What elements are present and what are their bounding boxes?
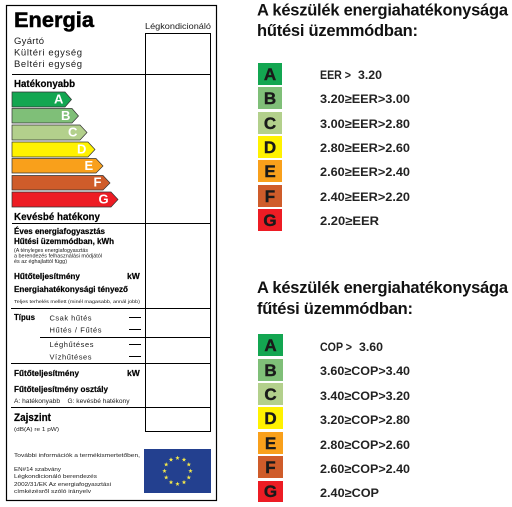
class B: B [264, 361, 277, 380]
type block: Léghűtéses [50, 340, 94, 349]
arrow B: B [61, 108, 70, 123]
annual consumption block: Teljes terhelés mellett (minél magasabb, annál jobb) [14, 299, 140, 305]
class C: C [264, 114, 276, 133]
class B: 3.60≥COP>3.40 [320, 364, 410, 378]
footer notes: 2002/31/EK Az energiafogyasztási [14, 482, 111, 488]
annual consumption block: (A tényleges energiafogyasztás [14, 248, 89, 254]
class D: D [264, 138, 276, 157]
heading: heating mode [257, 279, 509, 318]
class D [258, 407, 410, 429]
heading: cooling mode: A készülék energiahatékonysága [257, 2, 509, 20]
class E [258, 432, 410, 454]
type block: Csak hűtés [50, 314, 92, 322]
heating class table [258, 334, 410, 502]
class A [258, 334, 383, 356]
annual consumption block: kW [127, 271, 141, 281]
heating output block: Fűtőteljesítmény osztály [14, 384, 108, 394]
annual consumption block [14, 227, 141, 305]
class A: COP > [320, 340, 352, 354]
class A: A [264, 336, 277, 355]
manufacturer fields [14, 36, 82, 70]
manufacturer fields: Beltéri egység [14, 59, 82, 70]
class G [258, 481, 379, 502]
class B [258, 87, 410, 109]
noise block: (dB(A) re 1 pW) [14, 427, 59, 433]
annual consumption block: Hűtőteljesítmény [14, 271, 80, 281]
footer notes: További információk a termékismertetőben, [14, 453, 140, 459]
class E: E [264, 162, 276, 181]
class G [258, 209, 379, 231]
class G: 2.20≥EER [320, 214, 379, 228]
efficiency arrows [12, 92, 118, 207]
class B [258, 359, 410, 381]
manufacturer fields: Kültéri egység [14, 48, 82, 58]
class A: EER > [320, 68, 351, 82]
class F [258, 456, 410, 478]
class F [258, 185, 410, 207]
footer notes: címkézésről szóló irányelv [14, 489, 91, 495]
title: Energia [14, 9, 94, 32]
class A: A [264, 65, 276, 84]
arrow E: E [84, 158, 94, 173]
class F: 2.40≥EER>2.20 [320, 190, 410, 204]
column heading: Légkondicionáló [145, 21, 211, 31]
arrow F: F [94, 174, 102, 190]
heating output block: Fűtőteljesítmény [14, 368, 79, 378]
class C: 3.40≥COP>3.20 [320, 389, 410, 403]
annual consumption block: a berendezés felhasználási módjától [14, 254, 102, 260]
annual consumption block: és az éghajlattól függ) [14, 259, 67, 265]
noise block [14, 412, 59, 433]
heating output block [14, 368, 141, 405]
heading: heating mode: A készülék energiahatékonysága [257, 279, 509, 297]
heating output block: kW [127, 368, 141, 378]
class C: C [264, 385, 277, 404]
type block: Hűtés / Fűtés [50, 326, 102, 334]
column box: air conditioner [11, 34, 210, 432]
class D: 2.80≥EER>2.60 [320, 141, 410, 155]
class A: 3.20 [358, 68, 382, 82]
type block: Vízhűtéses [50, 352, 92, 362]
type block: Típus [14, 312, 35, 322]
manufacturer fields: Gyártó [14, 36, 44, 47]
arrow A: A [54, 92, 64, 106]
class F: 2.60≥COP>2.40 [320, 462, 410, 476]
annual consumption block: Hűtési üzemmódban, kWh [14, 237, 114, 246]
less efficient label: Kevésbé hatékony [14, 212, 100, 223]
noise block: Zajszint [14, 412, 51, 424]
class D: D [264, 409, 277, 428]
heating output block: G: kevésbé hatékony [68, 399, 130, 405]
class A [258, 63, 382, 85]
class C [258, 383, 410, 405]
class C: 3.00≥EER>2.80 [320, 117, 410, 131]
heading: heating mode: fűtési üzemmódban: [257, 300, 413, 318]
class D [258, 136, 410, 158]
class G: 2.40≥COP [320, 486, 379, 500]
energy label panel [6, 6, 216, 500]
class D: 3.20≥COP>2.80 [320, 413, 410, 427]
class C [258, 112, 410, 134]
cooling class table [258, 63, 410, 231]
class E: 2.80≥COP>2.60 [320, 438, 410, 452]
annual consumption block: Éves energiafogyasztás [14, 227, 106, 236]
class G: G [264, 482, 277, 501]
class B: B [264, 89, 276, 108]
footer notes: EN#14 szabvány [14, 467, 61, 473]
class F: F [265, 187, 275, 206]
class E: 2.60≥EER>2.40 [320, 165, 410, 179]
arrow G: G [98, 192, 109, 206]
annual consumption block: Energiahatékonysági tényező [14, 284, 128, 294]
class E: E [265, 434, 276, 453]
arrow C: C [68, 124, 78, 140]
arrow D: D [77, 142, 86, 156]
heading: cooling mode [257, 2, 509, 40]
footer notes [14, 453, 140, 495]
class F: F [265, 458, 276, 477]
class E [258, 160, 410, 182]
class G: G [263, 211, 277, 230]
heating output block: A: hatékonyabb [14, 399, 61, 405]
more efficient label: Hatékonyabb [14, 79, 75, 90]
class A: 3.60 [359, 340, 383, 354]
type block [14, 312, 141, 362]
footer notes: Légkondicionáló berendezés [14, 474, 97, 480]
heading: cooling mode: hűtési üzemmódban: [257, 22, 418, 40]
icon: EU flag [144, 449, 211, 493]
class B: 3.20≥EER>3.00 [320, 92, 410, 106]
